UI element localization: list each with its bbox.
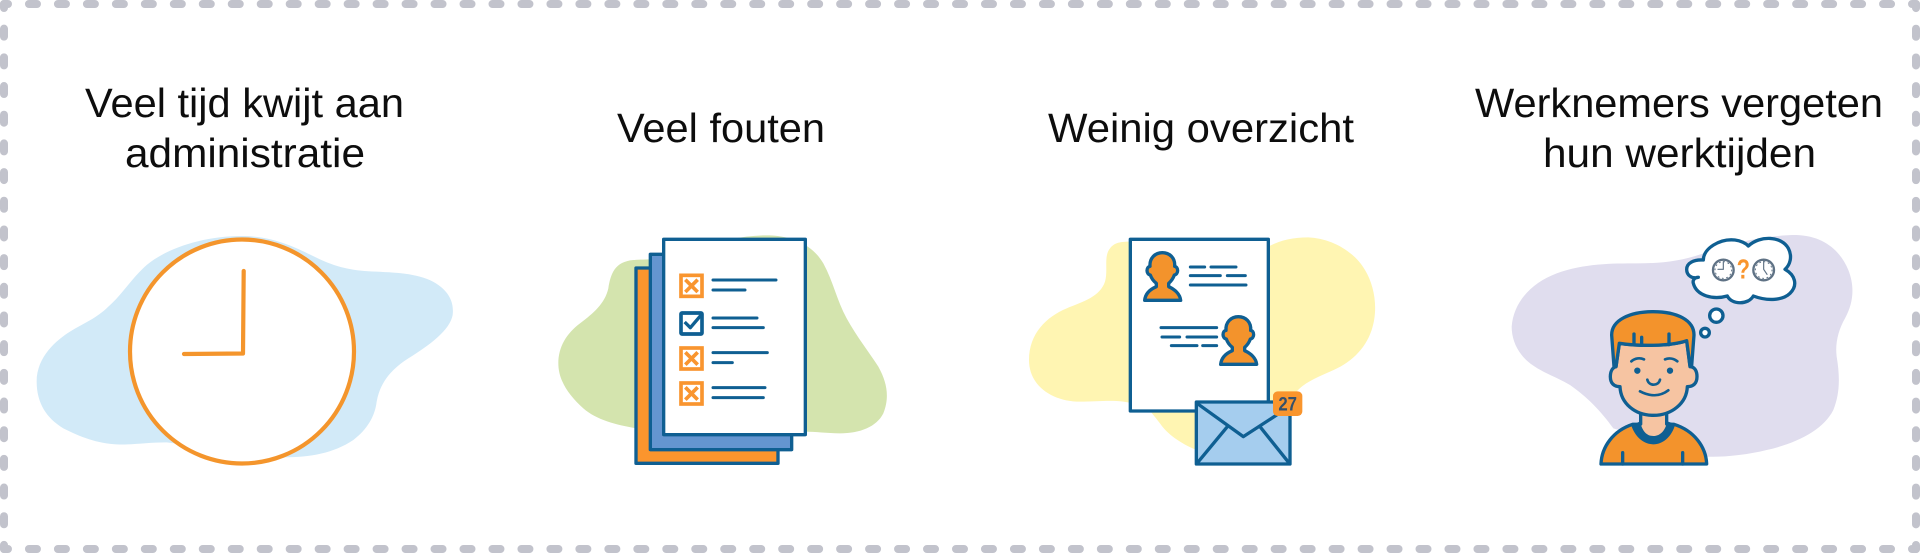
icon: thought cloud <box>1687 238 1795 303</box>
heading: Weinig overzicht: Weinig overzicht <box>1048 105 1355 151</box>
icon: neck <box>1641 410 1667 438</box>
blob: yellow background <box>1029 237 1375 450</box>
icon: blue middle sheet <box>650 254 792 450</box>
heading: Werknemers vergeten hun werktijden <box>1475 80 1883 176</box>
icon: two small clocks <box>1713 260 1774 280</box>
icon: person two <box>1221 317 1257 364</box>
heading: Veel fouten: Veel fouten <box>617 105 825 151</box>
badge: 27: 27 <box>1278 395 1297 416</box>
heading: Werknemers vergeten hun werktijden: hun werktijden <box>1543 130 1816 176</box>
heading: Werknemers vergeten hun werktijden: Werknemers vergeten <box>1475 80 1883 126</box>
icon: face and ears <box>1610 341 1697 415</box>
question mark: ? <box>1737 254 1750 285</box>
heading: Veel tijd kwijt aan administratie <box>85 80 404 176</box>
icon group: thinking man <box>1512 235 1852 464</box>
icon: torso <box>1601 424 1707 464</box>
panel: many errors <box>558 105 887 463</box>
heading: Veel tijd kwijt aan administratie: administratie <box>125 130 365 176</box>
heading: Veel tijd kwijt aan administratie: Veel tijd kwijt aan <box>85 80 404 126</box>
panel: time spent on administration <box>37 80 453 464</box>
checklist rows <box>681 275 776 404</box>
icon: white front sheet <box>664 239 805 435</box>
icon group: profile document and envelope <box>1029 237 1375 464</box>
text lines <box>1161 267 1246 346</box>
icon: collar <box>1631 421 1675 444</box>
icon: clock <box>130 240 354 464</box>
icon: facial features <box>1631 358 1677 395</box>
icon: envelope <box>1196 402 1290 464</box>
icon: man figure <box>1601 238 1795 464</box>
icon: person one <box>1145 253 1181 300</box>
blob: light blue background <box>37 236 453 457</box>
blob: lilac background <box>1512 235 1852 457</box>
badge: 27 <box>1273 391 1302 416</box>
panel: employees forget their hours <box>1475 80 1883 464</box>
icon: hair <box>1612 312 1694 367</box>
icon: orange back sheet <box>636 268 778 463</box>
panel: little overview <box>1029 105 1375 464</box>
icon group: documents with checklist <box>558 235 887 463</box>
blob: green background <box>558 235 887 433</box>
icon: thought dots <box>1710 309 1723 322</box>
icon: white document <box>1130 239 1268 411</box>
